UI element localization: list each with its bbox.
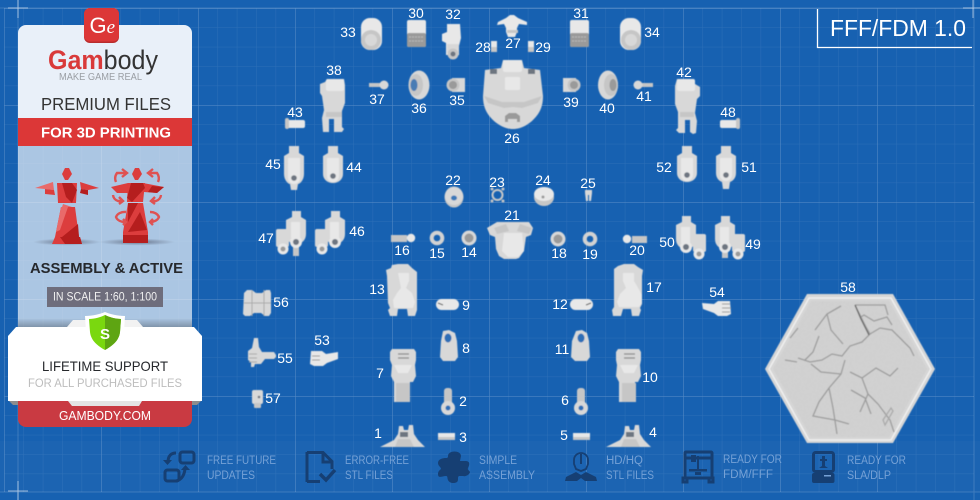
part number labels: 5 (560, 427, 568, 443)
part 25: small bracket (585, 190, 592, 201)
part 24: disc (534, 187, 554, 206)
part number labels: 48 (720, 104, 736, 120)
part number labels: 9 (462, 297, 470, 313)
part number labels: 37 (369, 91, 385, 107)
part 31: rocket pod (570, 20, 589, 47)
part number labels: 29 (535, 39, 551, 55)
feature: free future updates (163, 452, 276, 482)
part 28: small block (491, 41, 497, 52)
part 47: twin barrel arm (276, 211, 306, 256)
part number labels: 18 (551, 245, 567, 261)
part number labels: 22 (445, 172, 461, 188)
version tag: FFF/FDM 1.0 (830, 15, 966, 41)
part 21: waist (487, 222, 533, 259)
red footer with site url: GAMBODY.COM (59, 408, 151, 423)
part number labels: 50 (659, 234, 675, 250)
part 43: pin (285, 118, 305, 129)
icon: resin printer (812, 452, 834, 483)
part 42: upper arm (675, 79, 700, 134)
support card: FOR ALL PURCHASED FILES (28, 376, 182, 390)
part 4: foot (606, 425, 651, 447)
part 52: forearm barrel (677, 146, 697, 182)
part 41: ball joint (634, 80, 653, 90)
part number labels: 1 (374, 425, 382, 441)
part number labels: 23 (489, 174, 505, 190)
feature: hd/hq stl files: STL FILES (606, 470, 654, 482)
icon: puzzle piece (438, 452, 470, 483)
part number labels: 40 (599, 100, 615, 116)
part number labels: 34 (644, 24, 660, 40)
part number labels: 28 (475, 39, 491, 55)
part 12: capsule pin (570, 299, 593, 310)
part number labels: 10 (642, 369, 658, 385)
part number labels: 11 (555, 341, 569, 357)
part number labels: 20 (629, 242, 645, 258)
part 10: shin (616, 349, 641, 402)
feature: ready for fdm/fff: FDM/FFF (723, 469, 773, 481)
part number labels: 56 (273, 294, 289, 310)
part number labels: 17 (646, 279, 662, 295)
red banner: FOR 3D PRINTING (41, 126, 171, 142)
panel background (18, 25, 192, 330)
part 44: forearm barrel (323, 146, 343, 183)
part 6: link arm (574, 388, 588, 415)
part 22: round cap (444, 186, 464, 208)
part 2: link arm (441, 388, 455, 415)
part number labels: 47 (258, 230, 274, 246)
part 5: bar (573, 433, 590, 440)
figure: assembled statue (33, 168, 101, 246)
feature: ready for fdm/fff: READY FOR (723, 454, 782, 466)
part number labels: 57 (265, 390, 281, 406)
part number labels: 33 (340, 24, 356, 40)
feature: free future updates: FREE FUTURE (207, 455, 276, 467)
feature: error-free stl files (307, 452, 409, 482)
part number labels: 42 (676, 64, 692, 80)
part 58: hexagonal terrain base (765, 294, 935, 443)
part number labels: 54 (709, 284, 725, 300)
part number labels: 13 (369, 281, 385, 297)
feature: ready for sla/dlp: READY FOR (847, 455, 906, 467)
scale badge: IN SCALE 1:60, 1:100 (53, 292, 157, 304)
part 53: fist (310, 351, 338, 366)
icon: green shield: S (100, 326, 110, 343)
part number labels: 19 (582, 246, 598, 262)
assembly heading: ASSEMBLY & ACTIVE (30, 261, 183, 277)
part 14: bushing (462, 230, 476, 246)
part number labels: 7 (376, 365, 384, 381)
part number labels: 8 (462, 340, 470, 356)
part number labels: 4 (649, 424, 657, 440)
part 3: bar (438, 433, 455, 440)
brand wordmark: Gambody (48, 45, 158, 75)
part 36: shoulder ring (408, 70, 430, 100)
part number labels: 12 (552, 296, 568, 312)
part number labels: 26 (504, 130, 520, 146)
feature: hd/hq stl files: HD/HQ (606, 455, 643, 467)
part 33: thruster cylinder (361, 18, 382, 50)
part 26: helmet (483, 60, 543, 129)
part 34: thruster cylinder (620, 18, 641, 50)
version tag (818, 9, 972, 48)
part 9: capsule pin (436, 299, 459, 310)
part 23: clip ring (490, 188, 504, 202)
part 18: bushing (550, 232, 566, 246)
part 49: twin barrel arm (715, 216, 745, 260)
part 50: twin barrel arm (676, 216, 706, 260)
part number labels: 21 (504, 207, 520, 223)
part number labels: 24 (535, 172, 551, 188)
feature: ready for sla/dlp: SLA/DLP (847, 470, 891, 482)
part 27: winged crest (497, 15, 527, 37)
part number labels: 38 (326, 62, 342, 78)
feature: error-free stl files: ERROR-FREE (345, 455, 409, 467)
part number labels: 41 (636, 88, 652, 104)
icon: green shield (85, 312, 125, 353)
part 54: fist (702, 301, 731, 316)
part number labels: 3 (459, 429, 467, 445)
part 17: thigh (612, 264, 643, 316)
support card (8, 312, 202, 406)
part 46: twin barrel arm (315, 211, 345, 254)
feature: hd/hq stl files (565, 453, 654, 482)
part 11: armor plate (571, 330, 590, 361)
scale badge (47, 287, 163, 307)
part number labels: 6 (561, 392, 569, 408)
part number labels: 53 (314, 332, 330, 348)
part 7: shin (390, 349, 416, 402)
part number labels: 52 (656, 159, 672, 175)
feature: ready for sla/dlp (812, 452, 906, 483)
part 57: peg (252, 390, 263, 408)
part number labels: 27 (505, 35, 521, 51)
part 15: hex nut (432, 233, 442, 243)
part 39: socket block (563, 78, 580, 92)
sidebar panel (8, 8, 202, 427)
part number labels: 14 (461, 244, 477, 260)
part 20: ball joint (623, 235, 647, 243)
part number labels: 55 (277, 350, 293, 366)
part number labels: 58 (840, 279, 856, 295)
feature: error-free stl files: STL FILES (345, 470, 393, 482)
part number labels: 45 (265, 156, 281, 172)
feature: free future updates: UPDATES (207, 470, 255, 482)
exploded model parts (243, 15, 935, 447)
part number labels: 39 (563, 94, 579, 110)
icon: fdm printer (683, 452, 713, 482)
feature: simple assembly: SIMPLE (479, 455, 517, 467)
part 38: upper arm (320, 79, 345, 132)
support card: LIFETIME SUPPORT (42, 358, 168, 374)
part number labels: 25 (580, 175, 596, 191)
part number labels: 35 (449, 92, 465, 108)
part 55: open hand (248, 338, 276, 367)
part 16: ball joint (391, 234, 415, 242)
part number labels: 2 (459, 393, 467, 409)
brand wordmark: MAKE GAME REAL (59, 72, 142, 83)
part 35: socket block (446, 78, 465, 92)
part 45: forearm barrel (284, 146, 304, 190)
part 1: foot (380, 425, 425, 447)
feature: simple assembly: ASSEMBLY (479, 470, 535, 482)
part number labels: 46 (349, 223, 365, 239)
premium files heading: PREMIUM FILES (41, 94, 171, 114)
feature: ready for fdm/fff (683, 452, 782, 482)
part 19: hex nut (585, 234, 595, 244)
part number labels: 49 (745, 236, 761, 252)
part 13: thigh (386, 264, 417, 316)
brand logo icon: Ge (90, 13, 115, 38)
part number labels: 16 (394, 242, 410, 258)
feature: simple assembly (438, 452, 535, 483)
part 56: hip plate (243, 290, 271, 316)
part 8: armor plate (440, 330, 458, 361)
part number labels: 32 (445, 6, 461, 22)
part 30: rocket pod (407, 20, 426, 47)
icon: armored bust (565, 453, 597, 481)
red footer with site url (18, 398, 192, 427)
part 32: shoulder barrel (442, 24, 461, 60)
brand logo icon (84, 8, 119, 43)
icon: document with check (307, 452, 335, 482)
part number labels: 15 (429, 245, 445, 261)
part number labels: 43 (287, 104, 303, 120)
part number labels: 51 (741, 159, 757, 175)
part 40: shoulder ring (598, 70, 618, 100)
part 29: small block (528, 41, 534, 52)
part 48: pin (720, 118, 740, 129)
part number labels: 31 (573, 5, 589, 21)
icon: refresh squares (163, 452, 194, 481)
part number labels: 44 (346, 159, 362, 175)
red banner (18, 118, 192, 146)
part number labels: 30 (408, 5, 424, 21)
part number labels (258, 5, 856, 445)
part 51: forearm barrel (716, 146, 736, 189)
figure: articulated statue with rotation arrows (99, 168, 175, 246)
part 37: ball joint (369, 80, 388, 90)
part number labels: 36 (411, 100, 427, 116)
